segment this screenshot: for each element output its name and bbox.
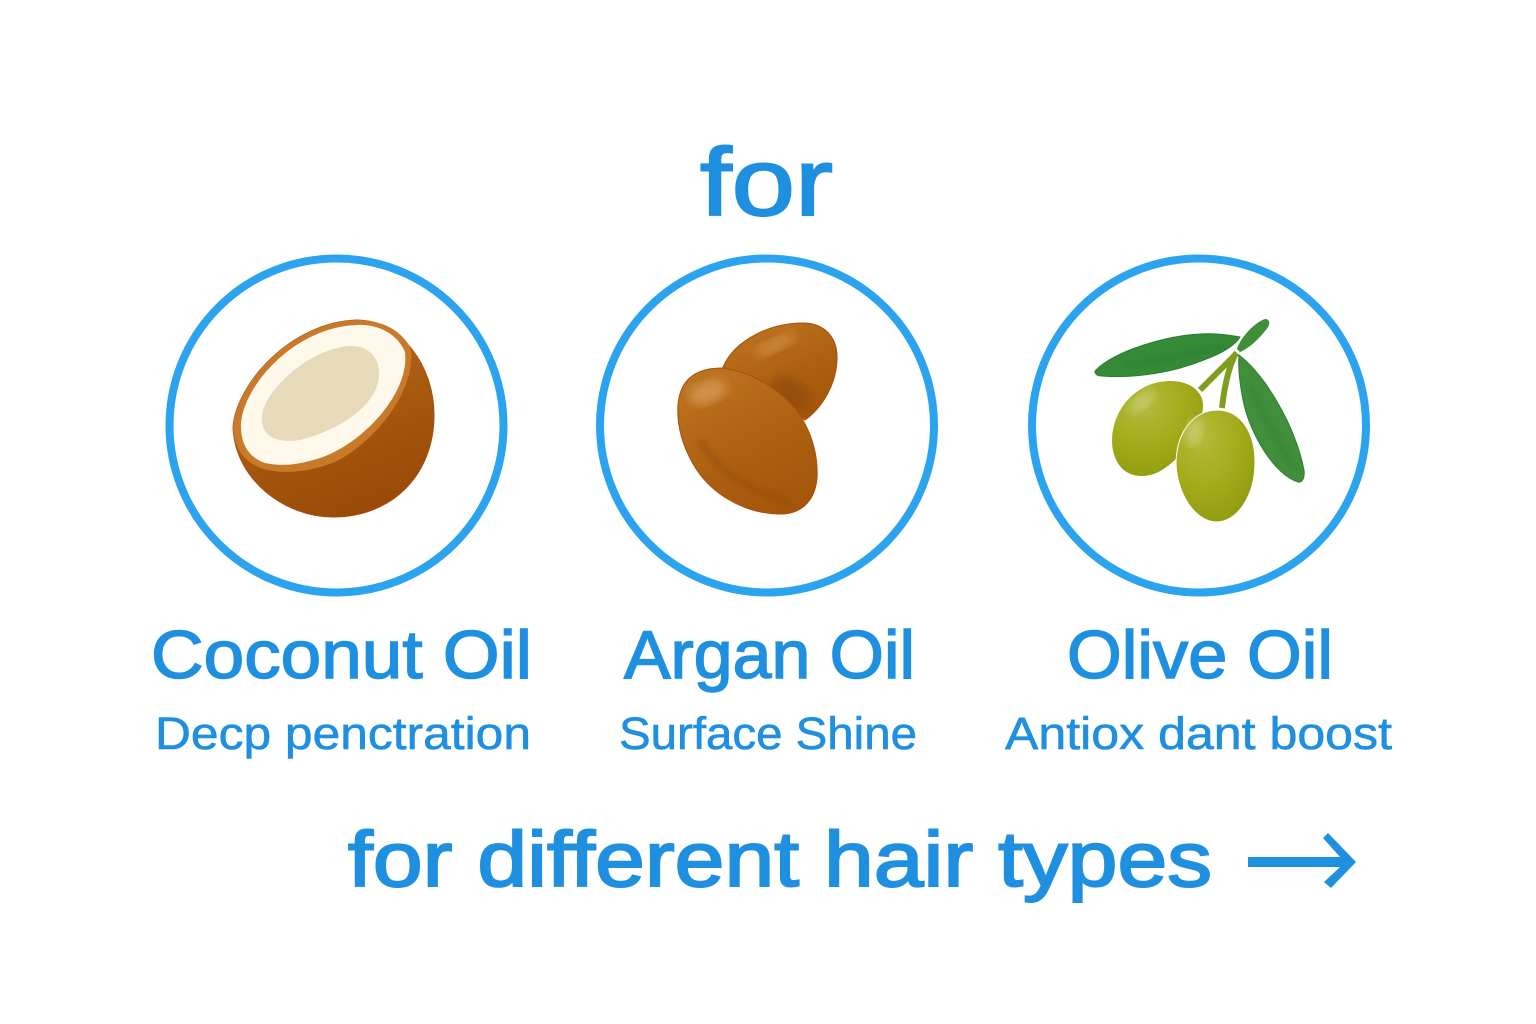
footer text: for different hair types — [348, 815, 1212, 903]
icon: argan nuts — [678, 323, 837, 514]
arrow — [1248, 833, 1356, 888]
title: for: for — [700, 129, 833, 236]
label: coconut oil: Coconut Oil — [151, 617, 532, 693]
circle: argan — [600, 258, 934, 592]
sublabel: surface shine: Surface Shine — [619, 708, 917, 759]
icon: coconut — [233, 320, 434, 517]
panel: coconut oil — [151, 258, 532, 759]
label: argan oil: Argan Oil — [624, 617, 915, 693]
circle: olive — [1032, 258, 1366, 592]
panel: argan oil — [600, 258, 934, 759]
label: olive oil: Olive Oil — [1067, 617, 1333, 693]
panel: olive oil — [1005, 258, 1393, 759]
sublabel: deep penetration: Decp penctration — [155, 708, 531, 759]
circle: coconut — [170, 258, 504, 592]
sublabel: antioxidant boost: Antiox dant boost — [1005, 708, 1393, 759]
icon: olive branch — [1095, 319, 1304, 522]
